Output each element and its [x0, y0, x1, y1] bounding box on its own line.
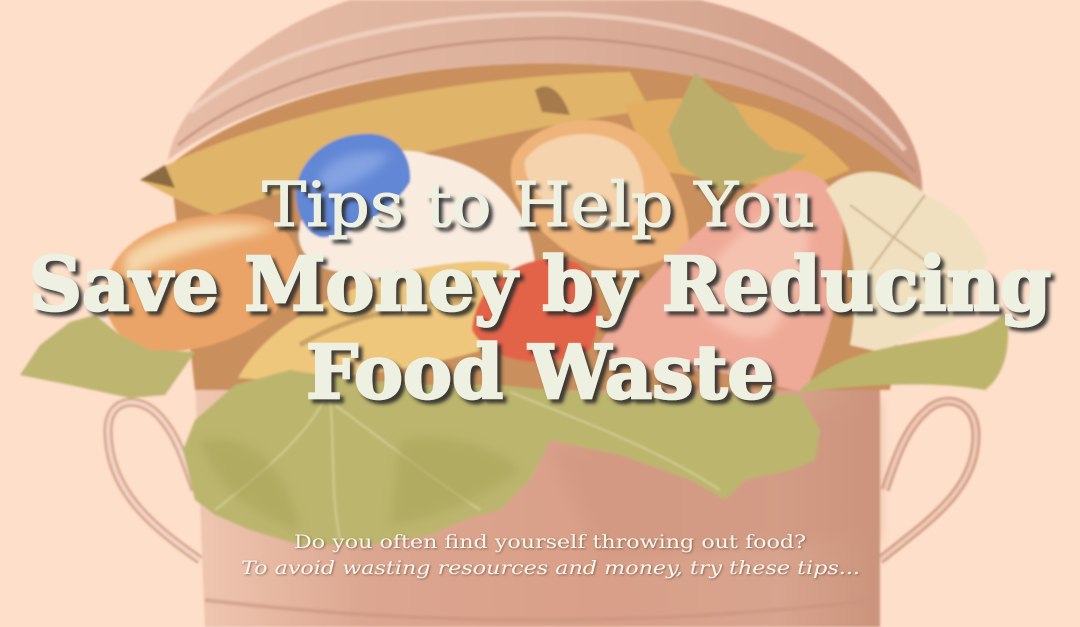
bottle cap	[296, 134, 410, 237]
lower banana	[238, 261, 510, 380]
center bread slice	[511, 120, 689, 269]
can body	[195, 380, 880, 627]
milk bottle	[299, 151, 535, 300]
tomato	[472, 259, 598, 362]
ham	[596, 170, 843, 392]
top banana	[140, 72, 650, 215]
can interior	[170, 63, 920, 390]
left bread roll	[105, 214, 298, 352]
title line 3: Food Waste	[306, 330, 774, 416]
intro line 1: Do you often find yourself throwing out food?	[294, 531, 806, 553]
title line 1: Tips to Help You	[262, 168, 815, 241]
left lettuce	[20, 315, 195, 398]
intro text	[241, 531, 860, 579]
can lid	[168, 0, 922, 192]
top lettuce leaf	[668, 72, 808, 195]
title	[29, 168, 1051, 416]
can handles	[108, 401, 976, 560]
right lettuce	[800, 312, 1008, 392]
front lettuce	[183, 370, 820, 545]
cheese package	[826, 172, 988, 352]
intro line 2: To avoid wasting resources and money, try these tips...	[241, 557, 860, 579]
title line 2: Save Money by Reducing	[29, 242, 1051, 328]
